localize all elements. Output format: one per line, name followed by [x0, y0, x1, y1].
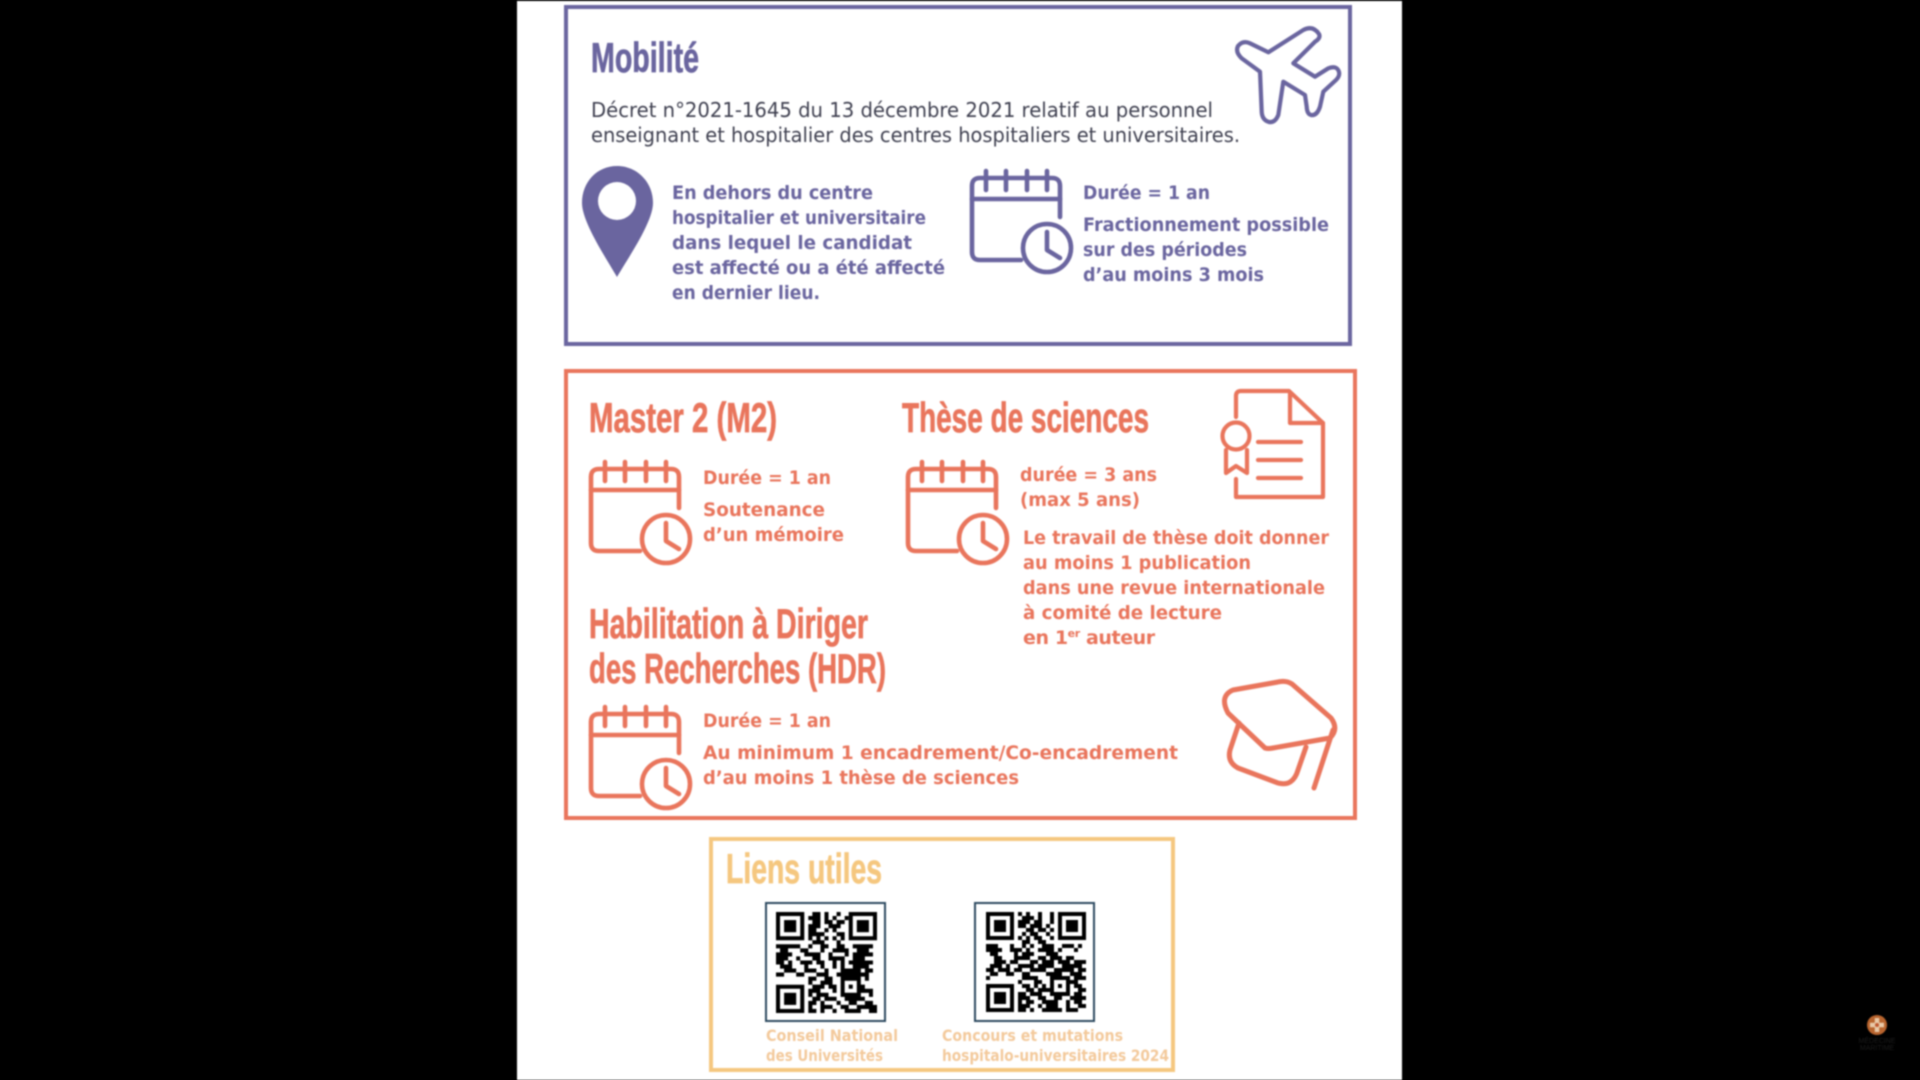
text block: durée mobilité: [1083, 182, 1329, 286]
text block: HDR: Au minimum 1 encadrement/Co-encadrement: [703, 742, 1178, 764]
panel: diplômes: [566, 371, 1355, 818]
text block: HDR: [703, 710, 1178, 789]
text block: travail de thèse: auteur: [1080, 627, 1156, 649]
logo: médecine maritime: MÉDECINE: [1859, 1036, 1896, 1045]
text block: M2: [703, 467, 844, 546]
text block: décret: enseignant et hospitalier des centres hospitaliers et universitaires.: [591, 123, 1240, 147]
text block: lieu: En dehors du centre: [672, 182, 873, 204]
text block: durée thèse: (max 5 ans): [1020, 489, 1140, 511]
icon: calendar thèse: [908, 462, 1007, 563]
text block: travail de thèse: en 1: [1023, 627, 1068, 649]
heading: Habilitation à Diriger des Recherches: des Recherches (HDR): [589, 645, 886, 692]
caption: CNU: Conseil National: [766, 1026, 898, 1045]
logo: médecine maritime: [1859, 1015, 1896, 1052]
text block: durée mobilité: d’au moins 3 mois: [1083, 264, 1264, 286]
page: white slide: [517, 1, 1402, 1080]
logo: médecine maritime: MARITIME: [1860, 1045, 1894, 1052]
caption: concours: Concours et mutations: [942, 1026, 1123, 1045]
icon: diploma: [1222, 391, 1323, 497]
icon: graduation cap: [1224, 681, 1335, 788]
text block: durée mobilité: Durée = 1 an: [1083, 182, 1210, 204]
text block: durée thèse: durée = 3 ans: [1020, 464, 1157, 486]
text block: travail de thèse: au moins 1 publication: [1023, 552, 1251, 574]
panel: Mobilité: [566, 7, 1350, 344]
text block: lieu: hospitalier et universitaire: [672, 207, 926, 229]
text block: travail de thèse: er: [1068, 627, 1081, 640]
text block: M2: d’un mémoire: [703, 524, 844, 546]
icon: plane: [1237, 28, 1339, 122]
text block: décret: [591, 98, 1240, 147]
heading: Thèse de sciences: Thèse de sciences: [902, 394, 1149, 441]
text block: décret: Décret n°2021-1645 du 13 décembre 2021 relatif au personnel: [591, 98, 1213, 122]
text block: travail de thèse: dans une revue internationale: [1023, 577, 1325, 599]
QR code: concours: [975, 903, 1094, 1021]
caption: concours: [942, 1026, 1169, 1065]
text block: lieu: est affecté ou a été affecté: [672, 257, 945, 279]
text block: lieu: dans lequel le candidat: [672, 232, 912, 254]
text block: lieu: [672, 182, 945, 304]
text block: travail de thèse: à comité de lecture: [1023, 602, 1222, 624]
heading: Habilitation à Diriger des Recherches: [589, 600, 886, 692]
caption: concours: hospitalo-universitaires 2024: [942, 1046, 1169, 1065]
icon: calendar M2: [591, 462, 690, 563]
icon: location pin: [582, 166, 653, 277]
text block: durée mobilité: Fractionnement possible: [1083, 214, 1329, 236]
text block: M2: Soutenance: [703, 499, 825, 521]
icon: calendar HDR: [591, 707, 690, 808]
text block: HDR: d’au moins 1 thèse de sciences: [703, 767, 1019, 789]
text block: lieu: en dernier lieu.: [672, 282, 820, 304]
text block: travail de thèse: [1023, 527, 1330, 649]
text block: durée thèse: [1020, 464, 1157, 511]
heading: Mobilité: Mobilité: [591, 34, 699, 81]
text block: durée mobilité: sur des périodes: [1083, 239, 1247, 261]
icon: calendar with clock: [972, 171, 1071, 272]
text block: travail de thèse: Le travail de thèse doit donner: [1023, 527, 1330, 549]
caption: CNU: des Universités: [766, 1046, 883, 1065]
caption: CNU: [766, 1026, 898, 1065]
QR code: CNU: [766, 903, 885, 1021]
heading: Master 2: Master 2 (M2): [589, 394, 777, 441]
heading: Habilitation à Diriger des Recherches: Habilitation à Diriger: [589, 600, 868, 647]
text block: M2: Durée = 1 an: [703, 467, 831, 489]
panel: Liens utiles: [711, 839, 1173, 1070]
text block: HDR: Durée = 1 an: [703, 710, 831, 732]
heading: Liens utiles: Liens utiles: [726, 845, 882, 892]
